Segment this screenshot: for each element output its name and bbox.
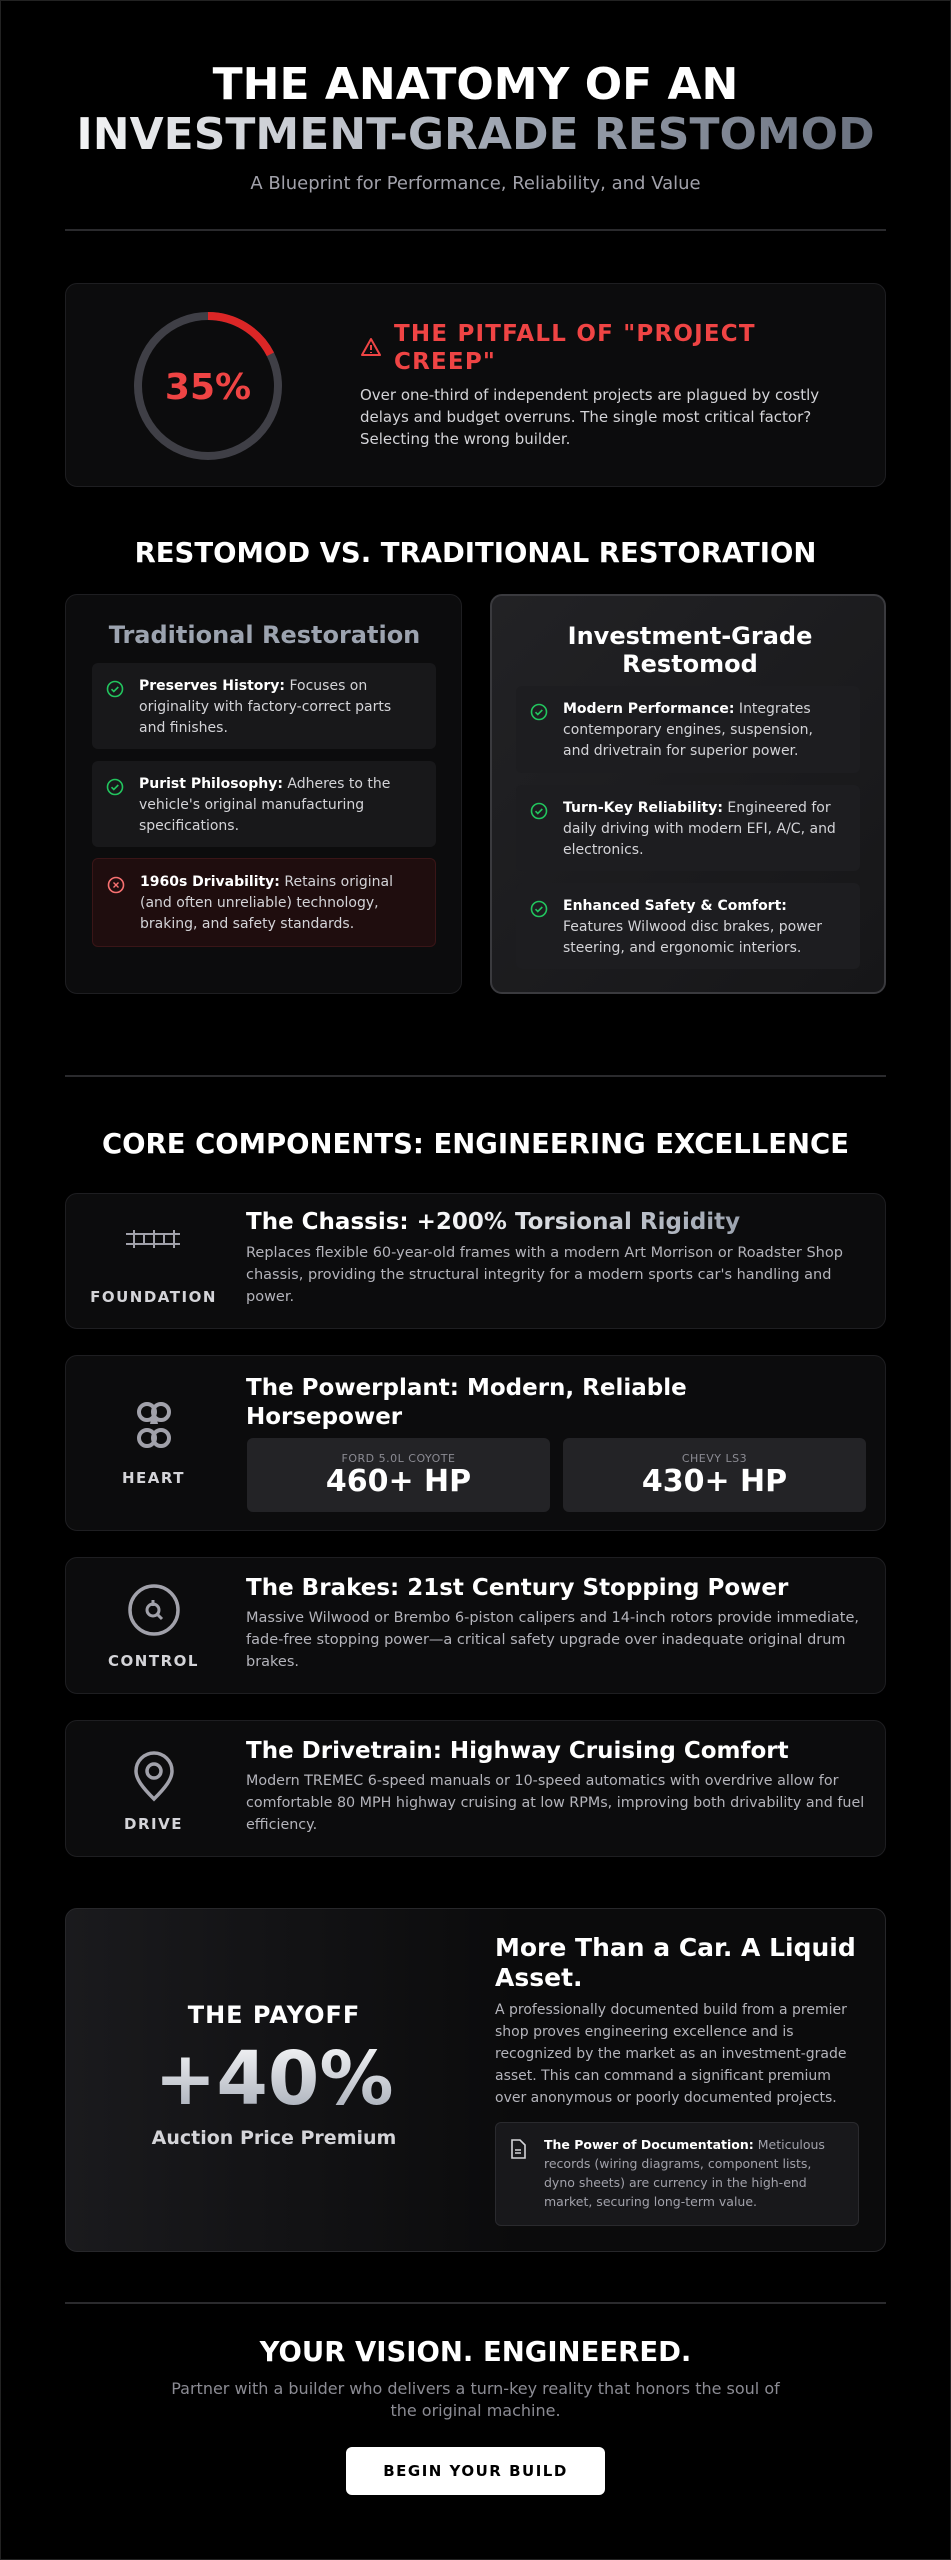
liquid asset text: Asset. (495, 1963, 583, 1992)
card: chassis: The Chassis: +200% Torsional Rigidity (246, 1209, 740, 1235)
liquid asset text: More Than a Car. A Liquid (495, 1933, 856, 1962)
panel: restomod: Investment-Grade (568, 622, 812, 650)
stat: ford: FORD 5.0L COYOTE (342, 1452, 455, 1465)
card: chassis: Replaces flexible 60-year-old frames with a modern Art Morrison or Roadster Shop chassis, providing the structural integrity for a modern sports car's handling and power. (246, 1245, 843, 1305)
donut chart 35%: 35% (165, 367, 251, 408)
liquid asset text (495, 1933, 856, 1992)
card: brakes: The Brakes: 21st Century Stopping Power (246, 1575, 788, 1601)
card: chassis: FOUNDATION (90, 1288, 217, 1306)
card: powerplant: Horsepower (246, 1404, 402, 1430)
pitfall text: Over one-third of independent projects are plagued by costly delays and budget overruns. The single most critical factor? Selecting the wrong builder. (360, 386, 819, 448)
icon: warning (361, 338, 381, 356)
heading: comparison: RESTOMOD VS. TRADITIONAL RESTORATION (135, 537, 816, 569)
item: performance: Modern Performance: Integrates contemporary engines, suspension, and drivetrain for superior power. (563, 701, 813, 759)
item: preserves history: Preserves History: Focuses on originality with factory-correct parts and finishes. (139, 678, 391, 736)
donut chart 35% (134, 312, 282, 460)
panel: restomod (490, 594, 886, 994)
item: reliability: Turn-Key Reliability: Engineered for daily driving with modern EFI, A/C, and electronics. (563, 800, 836, 858)
icon: pin (134, 1751, 174, 1802)
item: drivability (92, 858, 436, 947)
item: purist: Purist Philosophy: Adheres to the vehicle's original manufacturing specifications. (139, 776, 390, 834)
pitfall heading (394, 321, 756, 375)
icon: engine (137, 1402, 171, 1448)
pitfall heading: CREEP" (394, 349, 496, 375)
stat: ford: 460+ HP (326, 1464, 471, 1499)
card: powerplant: The Powerplant: Modern, Reliable (246, 1375, 687, 1401)
card: brakes (65, 1557, 886, 1694)
button (346, 2447, 605, 2495)
panel: pitfall (65, 283, 886, 487)
item: safety (516, 883, 860, 969)
payoff stat (152, 2001, 396, 2149)
stat: chevy: 430+ HP (642, 1464, 787, 1499)
callout: documentation (495, 2122, 859, 2226)
title (76, 59, 875, 160)
card: chassis (65, 1193, 886, 1329)
card: drivetrain: Modern TREMEC 6-speed manuals or 10-speed automatics with overdrive allow for comfortable 80 MPH highway cruising at low RPMs, improving both drivability and fuel efficiency. (246, 1773, 864, 1833)
stat: ford (247, 1438, 550, 1512)
card: drivetrain: The Drivetrain: Highway Cruising Comfort (246, 1738, 789, 1764)
closing heading: YOUR VISION. ENGINEERED. (260, 2336, 691, 2368)
card: drivetrain (65, 1720, 886, 1857)
payoff stat: Auction Price Premium (152, 2127, 396, 2149)
item: safety: Enhanced Safety & Comfort: Features Wilwood disc brakes, power steering, and ergonomic interiors. (563, 898, 822, 956)
card: powerplant: HEART (122, 1469, 185, 1487)
item: drivability: 1960s Drivability: Retains original (and often unreliable) technology, braking, and safety standards. (140, 874, 393, 932)
stat: chevy (563, 1438, 866, 1512)
title: INVESTMENT-GRADE RESTOMOD (76, 109, 875, 160)
item: preserves history (92, 663, 436, 749)
icon: brake (128, 1584, 180, 1636)
subtitle: A Blueprint for Performance, Reliability, and Value (250, 173, 701, 194)
heading: core components: CORE COMPONENTS: ENGINEERING EXCELLENCE (102, 1128, 849, 1160)
panel: restomod: Restomod (622, 650, 758, 678)
panel: payoff (65, 1908, 886, 2252)
item: performance (516, 686, 860, 773)
payoff stat: +40% (154, 2036, 394, 2122)
item: reliability (516, 785, 860, 871)
title: THE ANATOMY OF AN (213, 59, 738, 110)
callout: documentation: The Power of Documentation: Meticulous records (wiring diagrams, component lists, dyno sheets) are currency in the high-end market, securing long-term value. (544, 2137, 825, 2209)
card: brakes: Massive Wilwood or Brembo 6-piston calipers and 14-inch rotors provide immediate, fade-free stopping power—a critical safety upgrade over inadequate original drum brakes. (246, 1610, 859, 1670)
card: brakes: CONTROL (108, 1652, 199, 1670)
pitfall heading: THE PITFALL OF "PROJECT (394, 321, 756, 347)
payoff stat: THE PAYOFF (188, 2001, 360, 2029)
card: powerplant (65, 1355, 886, 1531)
panel: traditional (65, 594, 462, 994)
button: BEGIN YOUR BUILD (383, 2462, 568, 2480)
item: purist (92, 761, 436, 847)
panel: traditional: Traditional Restoration (109, 621, 420, 649)
closing text: Partner with a builder who delivers a turn-key reality that honors the soul of the original machine. (171, 2379, 780, 2420)
stat: chevy: CHEVY LS3 (682, 1452, 747, 1465)
icon: frame (126, 1230, 180, 1248)
panel: payoff: A professionally documented build from a premier shop proves engineering excellence and is recognized by the market as an investment-grade asset. This can command a significant premium over anonymous or poorly documented projects. (495, 2002, 847, 2106)
card: drivetrain: DRIVE (124, 1815, 183, 1833)
